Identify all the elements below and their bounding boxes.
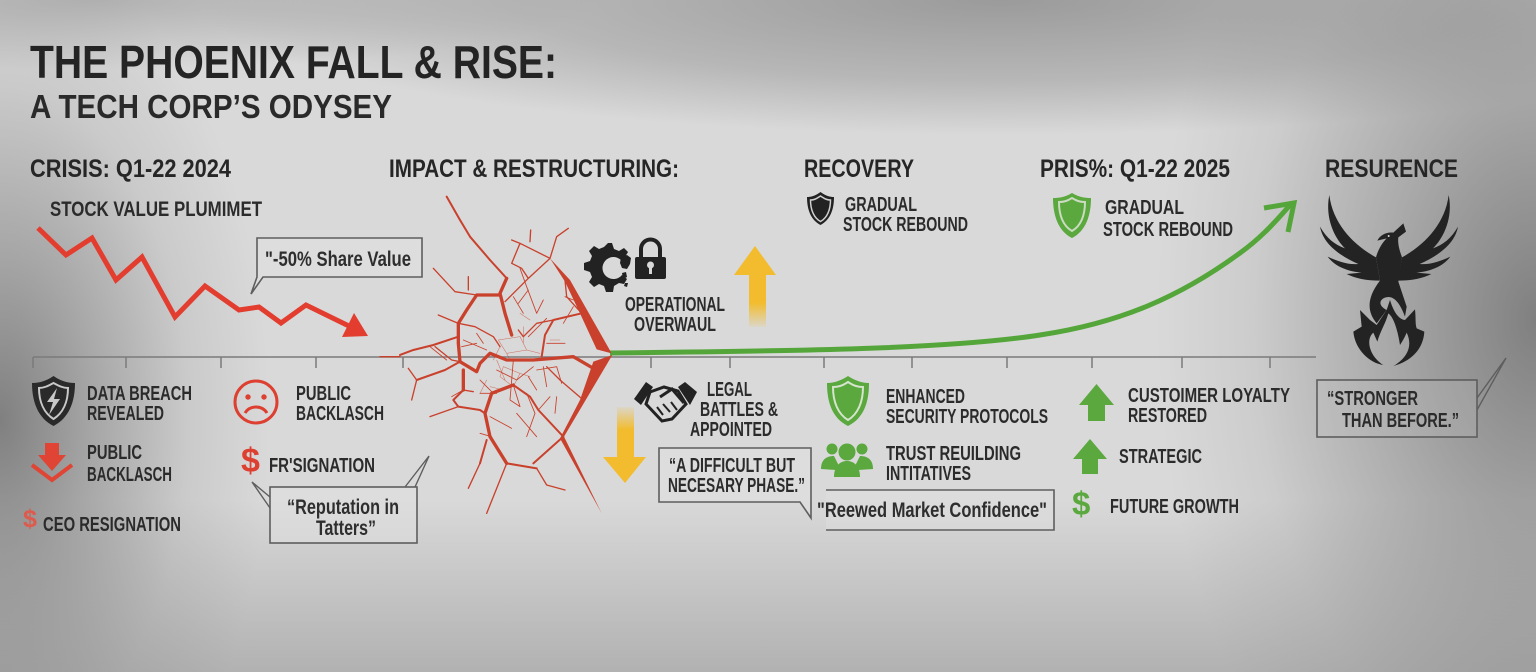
section headings: RECOVERY (804, 155, 914, 183)
text: public backlash left: PUBLIC (87, 442, 142, 464)
icon: green shield enhanced security (827, 376, 869, 426)
section headings: PRIS%: Q1-22 2025 (1040, 155, 1230, 183)
icon and text: CEO resignation (23, 505, 181, 536)
icon: red down arrow (32, 443, 72, 480)
text: data breach revealed (87, 383, 192, 425)
icon: phoenix rising from flames (1320, 195, 1458, 366)
callout: renewed market confidence (817, 490, 1054, 530)
green recovery curve with arrow (610, 203, 1294, 353)
callout: renewed market confidence: "Reewed Market Confidence" (817, 499, 1047, 522)
text: customer loyalty restored: CUSTOIMER LOYALTY (1128, 385, 1290, 407)
title: THE PHOENIX FALL & RISE: (30, 36, 557, 88)
icon: green shield top (1053, 193, 1091, 238)
section headings: IMPACT & RESTRUCTURING: (389, 155, 679, 183)
section headings (30, 155, 1458, 183)
text: gradual rebound prism (1103, 197, 1233, 241)
callout: share value: "-50% Share Value (265, 248, 411, 271)
icon: handshake (634, 382, 697, 421)
text: public backlash right (296, 383, 384, 425)
icon: yellow down arrow (603, 407, 646, 483)
text: legal battles: BATTLES & (700, 399, 778, 421)
title (30, 36, 557, 125)
text: operational overhaul (625, 294, 725, 336)
text: gradual rebound recovery: GRADUAL (845, 194, 917, 216)
callout: stronger than before (1317, 358, 1506, 437)
icon: dark shield (807, 192, 834, 225)
text: trust rebuilding: INTITATIVES (886, 463, 971, 485)
timeline axis (33, 357, 1316, 368)
callout: difficult phase: “A DIFFICULT BUT (669, 455, 795, 477)
text: gradual rebound recovery (843, 194, 968, 236)
text: trust rebuilding: TRUST REUILDING (886, 443, 1021, 465)
text: data breach revealed: REVEALED (87, 403, 164, 425)
callout: reputation in tatters (252, 456, 429, 543)
text: enhanced security protocols: ENHANCED (886, 386, 965, 408)
callout: difficult phase: NECESARY PHASE.” (668, 475, 805, 497)
section headings: CRISIS: Q1-22 2024 (30, 155, 231, 183)
text: trust rebuilding (886, 443, 1021, 485)
callout: stronger than before: THAN BEFORE.” (1342, 410, 1459, 432)
icon: sad face (235, 381, 277, 423)
icon and text: CEO resignation: CEO RESIGNATION (43, 514, 181, 536)
text: public backlash right: PUBLIC (296, 383, 351, 405)
text: strategic: STRATEGIC (1119, 446, 1202, 468)
icon and text: resignation: $ (241, 442, 260, 480)
falling stock line chart (38, 228, 368, 337)
callout: share value (251, 238, 422, 294)
title: A TECH CORP’S ODYSEY (30, 88, 392, 125)
callout: stronger than before: “STRONGER (1327, 388, 1418, 410)
text: legal battles (690, 379, 778, 441)
text: gradual rebound prism: STOCK REBOUND (1103, 219, 1233, 241)
text: customer loyalty restored: RESTORED (1128, 405, 1207, 427)
callout: reputation in tatters: “Reputation in (287, 496, 399, 519)
text: public backlash left (87, 442, 172, 486)
text: legal battles: APPOINTED (690, 419, 772, 441)
icon: green dollar: $ (1072, 485, 1090, 522)
icon and text: resignation (241, 442, 375, 480)
section headings: RESURENCE (1325, 155, 1458, 183)
text: enhanced security protocols (886, 386, 1048, 428)
text: future growth: FUTURE GROWTH (1110, 496, 1239, 518)
text: data breach revealed: DATA BREACH (87, 383, 192, 405)
stock value plummet heading: STOCK VALUE PLUMIMET (50, 198, 262, 221)
icon: yellow up arrow (734, 246, 776, 327)
text: public backlash left: BACKLASCH (87, 464, 172, 486)
text: customer loyalty restored (1128, 385, 1290, 427)
text: gradual rebound prism: GRADUAL (1105, 197, 1184, 219)
text: operational overhaul: OVERWAUL (634, 314, 716, 336)
shattered crack graphic (380, 197, 612, 513)
callout: reputation in tatters: Tatters” (316, 517, 376, 540)
icon and text: CEO resignation: $ (23, 505, 37, 533)
icon and text: resignation: FR'SIGNATION (269, 455, 375, 477)
text: legal battles: LEGAL (707, 379, 752, 401)
text: operational overhaul: OPERATIONAL (625, 294, 725, 316)
icon: broken gear and padlock (584, 240, 666, 292)
icon: green people (821, 444, 873, 477)
icon: data breach shield (32, 376, 75, 426)
text: public backlash right: BACKLASCH (296, 403, 384, 425)
icon: green up arrow two (1073, 439, 1107, 474)
icon: green up arrow one (1079, 384, 1114, 421)
text: enhanced security protocols: SECURITY PROTOCOLS (886, 406, 1048, 428)
text: gradual rebound recovery: STOCK REBOUND (843, 214, 968, 236)
callout: difficult phase (659, 448, 811, 518)
